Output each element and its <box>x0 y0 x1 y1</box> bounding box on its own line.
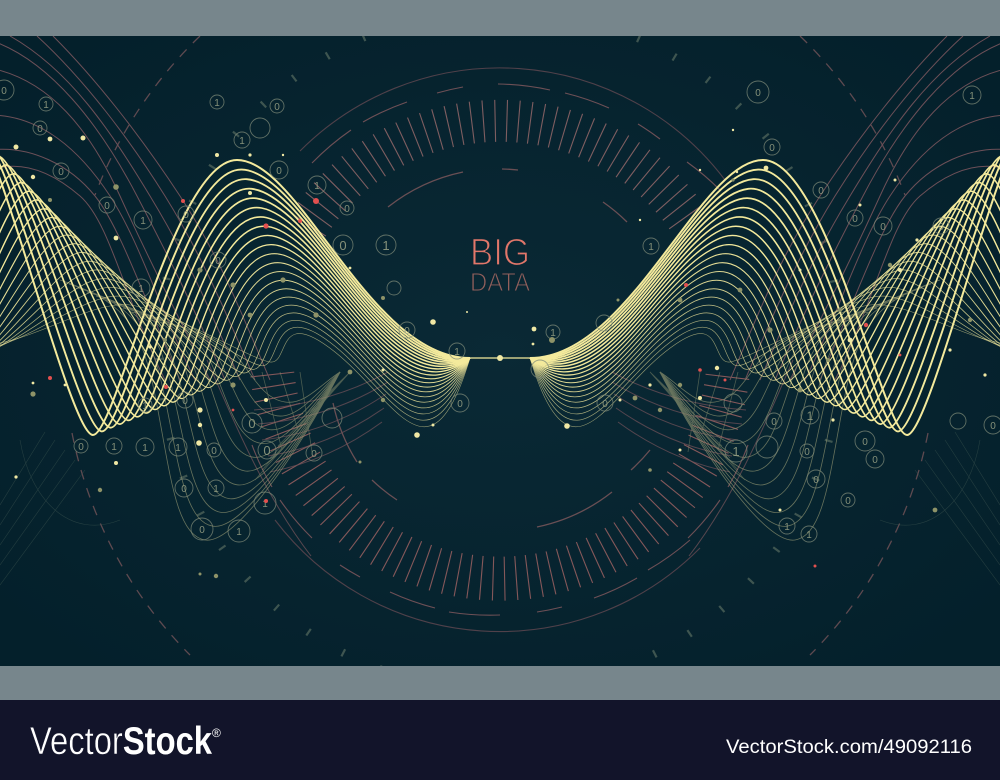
binary digits: 1 <box>969 91 975 102</box>
maroon background lines <box>0 36 388 556</box>
binary digits: 1 <box>142 401 148 412</box>
binary digits: 1 <box>648 242 654 253</box>
bottom grey band <box>0 666 1000 700</box>
heading: big data <box>472 239 530 290</box>
radial ticks top <box>308 121 692 225</box>
binary digits: 0 <box>938 222 944 233</box>
center connecting line <box>468 357 532 359</box>
heading word DATA: DATA <box>470 267 531 297</box>
binary digits: 0 <box>818 186 824 197</box>
faint corner lines <box>0 432 120 585</box>
binary digits: 1 <box>550 328 556 339</box>
brand logo: VectorStock <box>30 720 212 763</box>
binary digits: 1 <box>43 100 49 111</box>
binary digits: 0 <box>58 167 64 178</box>
binary digits: 0 <box>880 222 886 233</box>
binary digits: 1 <box>454 347 460 358</box>
binary digits: 1 <box>214 98 220 109</box>
binary digits: 1 <box>732 444 740 459</box>
image reference text: VectorStock.com/49092116 <box>726 737 972 758</box>
short olive outer ticks <box>159 9 841 691</box>
binary digits: 0 <box>1 86 7 97</box>
binary digits: 0 <box>771 417 777 428</box>
binary digits: 1 <box>111 442 117 453</box>
binary digits: 0 <box>215 256 221 267</box>
binary digits: 1 <box>239 136 245 147</box>
binary digits: 1 <box>806 530 812 541</box>
binary digits: 0 <box>845 496 851 507</box>
binary digits: 1 <box>138 284 144 295</box>
binary digits: 0 <box>78 442 84 453</box>
dashed middle arcs <box>252 84 748 615</box>
binary digits: 0 <box>813 475 819 486</box>
binary digits: 1 <box>236 527 242 538</box>
binary digits: 0 <box>344 204 350 215</box>
large dashed circle arcs <box>72 36 928 655</box>
bright wave lines <box>0 130 470 435</box>
heading word BIG: BIG <box>470 232 530 274</box>
binary digits: 1 <box>262 499 268 510</box>
right wave assembly mirrored <box>530 36 1000 585</box>
binary digits: 0 <box>183 210 189 221</box>
binary digits: 1 <box>142 443 148 454</box>
radial ticks bottom <box>272 374 728 579</box>
binary digits: 1 <box>784 522 790 533</box>
binary digits: 1 <box>175 443 181 454</box>
binary digits: 0 <box>755 88 761 99</box>
binary digits: 0 <box>990 421 996 432</box>
binary digits: 0 <box>457 399 463 410</box>
cream data dots <box>14 129 987 512</box>
footer bar <box>0 700 1000 780</box>
binary digits: 1 <box>213 484 219 495</box>
binary digits: 0 <box>602 399 608 410</box>
binary number rings <box>0 80 1000 542</box>
binary digits: 1 <box>807 409 814 423</box>
left wave assembly <box>0 36 470 585</box>
binary digits <box>1 86 996 541</box>
binary digits: 0 <box>181 484 187 495</box>
top grey band <box>0 0 1000 36</box>
binary digits: 0 <box>862 437 868 448</box>
binary digits: 0 <box>276 166 282 177</box>
red data dots <box>48 198 901 568</box>
binary digits: 1 <box>314 181 320 192</box>
binary digits: 1 <box>140 216 146 227</box>
olive data dots <box>30 178 972 578</box>
binary digits: 0 <box>872 455 878 466</box>
faint lower wave family <box>60 280 350 540</box>
binary digits: 0 <box>404 326 410 337</box>
binary digits: 0 <box>199 525 205 536</box>
binary digits: 0 <box>37 124 43 135</box>
binary digits: 0 <box>339 238 347 253</box>
inner dashed arcs <box>333 169 650 527</box>
binary digits: 0 <box>248 416 256 431</box>
binary digits: 0 <box>211 446 217 457</box>
binary digits: 0 <box>852 214 858 225</box>
registered mark: ® <box>212 726 221 740</box>
binary digits: 0 <box>274 102 280 113</box>
binary digits: 0 <box>263 443 271 458</box>
binary digits: 0 <box>182 396 188 407</box>
binary digits: 0 <box>311 449 317 460</box>
binary digits: 0 <box>769 143 775 154</box>
binary digits: 0 <box>104 201 110 212</box>
radial ring graphic <box>72 36 928 655</box>
outer thin arcs <box>275 68 725 632</box>
binary digits: 0 <box>804 447 810 458</box>
binary digits: 1 <box>382 238 390 253</box>
